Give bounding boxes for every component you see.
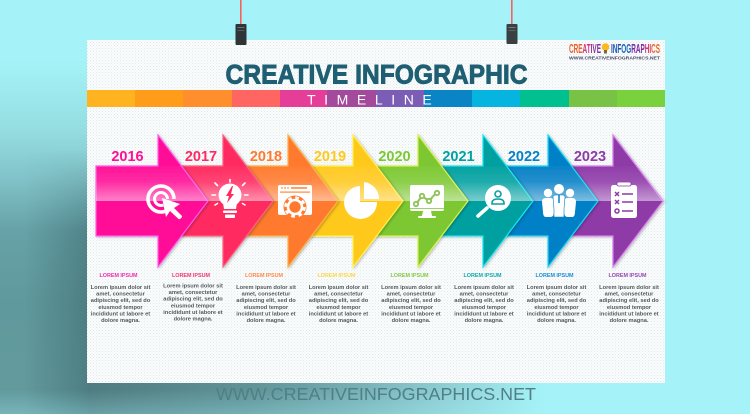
text block 2017: amet, consectetur	[169, 290, 218, 296]
text block 2018: incididunt ut labore et	[236, 311, 296, 317]
text block 2020: incididunt ut labore et	[381, 311, 441, 317]
text block 2020: adipiscing elit, sed do	[381, 298, 441, 304]
clip right	[506, 24, 518, 44]
text block 2018: dolore magna.	[247, 318, 286, 324]
logo: creative infographics	[569, 41, 660, 62]
text block 2019: dolore magna.	[319, 318, 358, 324]
title: CREATIVE INFOGRAPHIC	[226, 60, 528, 90]
text block 2023: adipiscing elit, sed do	[599, 298, 659, 304]
text block 2019: adipiscing elit, sed do	[309, 298, 369, 304]
year labels	[111, 149, 606, 165]
text block 2023: eiusmod tempor	[607, 305, 652, 311]
arrow 2016	[96, 135, 208, 267]
text block 2023: Lorem ipsum dolor sit	[599, 285, 659, 291]
text block 2023: incididunt ut labore et	[599, 311, 659, 317]
text block 2018: Lorem ipsum dolor sit	[236, 285, 296, 291]
year labels: 2017	[185, 149, 217, 165]
panel shadow	[0, 60, 545, 414]
text block 2021: amet, consectetur	[460, 292, 509, 298]
text block 2021: adipiscing elit, sed do	[454, 298, 514, 304]
icon: magnifier with user	[478, 185, 511, 216]
text block 2020: eiusmod tempor	[389, 305, 434, 311]
text block 2019: eiusmod tempor	[316, 305, 361, 311]
year labels: 2020	[378, 149, 411, 165]
year labels: 2022	[508, 149, 540, 165]
text block 2021: eiusmod tempor	[462, 305, 507, 311]
icon: light bulb	[212, 180, 248, 218]
subtitle: timeline: TIMELINE	[307, 92, 440, 108]
text block 2022: Lorem ipsum dolor sit	[527, 285, 586, 291]
arrow 2023	[551, 135, 663, 267]
year labels: 2023	[574, 149, 606, 165]
footer url: WWW.CREATIVEINFOGRAPHICS.NET	[216, 384, 536, 404]
text block 2022: eiusmod tempor	[534, 305, 579, 311]
logo: creative infographics: CREATIVE	[569, 41, 601, 56]
text block 2021: dolore magna.	[465, 318, 504, 324]
text block 2016: Lorem ipsum dolor sit	[91, 285, 150, 291]
icon: monitor with line chart	[410, 185, 444, 218]
text block 2016: adipiscing elit, sed do	[91, 298, 151, 304]
text block 2018: eiusmod tempor	[244, 305, 289, 311]
text block 2017: Lorem ipsum dolor sit	[163, 284, 223, 290]
text block 2017: eiusmod tempor	[171, 303, 216, 309]
column headings: LOREM IPSUM	[317, 273, 356, 279]
text block 2021: incididunt ut labore et	[454, 311, 514, 317]
text block 2017: dolore magna.	[174, 316, 213, 322]
column headings	[99, 273, 647, 279]
text block 2022: incididunt ut labore et	[527, 311, 586, 317]
arrow 2022	[486, 135, 598, 267]
text block 2022: dolore magna.	[537, 318, 576, 324]
year labels: 2018	[250, 149, 282, 165]
clip left	[236, 24, 246, 45]
text block 2023: dolore magna.	[610, 318, 649, 324]
year labels: 2019	[314, 149, 346, 165]
text block 2018: adipiscing elit, sed do	[236, 298, 296, 304]
column headings: LOREM IPSUM	[172, 273, 211, 279]
text block 2016: eiusmod tempor	[98, 305, 143, 311]
text block 2021: Lorem ipsum dolor sit	[454, 285, 514, 291]
text block 2022: adipiscing elit, sed do	[527, 298, 587, 304]
year labels: 2016	[111, 149, 144, 165]
arrow 2021	[421, 135, 533, 267]
arrow 2019	[291, 135, 403, 267]
column headings: LOREM IPSUM	[245, 273, 284, 279]
text block 2017: incididunt ut labore et	[163, 310, 223, 316]
text block 2016: amet, consectetur	[96, 292, 146, 298]
text block 2017: adipiscing elit, sed do	[163, 297, 223, 303]
text block 2018: amet, consectetur	[242, 292, 291, 298]
column headings: LOREM IPSUM	[390, 273, 429, 279]
text block 2016: incididunt ut labore et	[91, 311, 150, 317]
hanging rope right	[511, 0, 513, 25]
text block 2019: incididunt ut labore et	[309, 311, 368, 317]
icon: checklist clipboard	[611, 182, 637, 218]
white poster panel	[87, 40, 665, 383]
logo: creative infographics: INFOGRAPHICS	[611, 41, 660, 56]
text block 2019: amet, consectetur	[314, 292, 364, 298]
icon: click target	[148, 186, 182, 219]
logo: creative infographics: WWW.CREATIVEINFOGRAPHICS.NET	[569, 56, 660, 62]
arrow 2020	[356, 135, 468, 267]
icon: pie chart	[344, 182, 379, 219]
arrow 2018	[226, 135, 338, 267]
icon: group of people	[542, 184, 576, 217]
text block 2023: amet, consectetur	[605, 292, 654, 298]
rainbow band	[87, 90, 665, 107]
column headings: LOREM IPSUM	[535, 273, 574, 279]
hanging rope left	[240, 0, 242, 25]
column headings: LOREM IPSUM	[99, 273, 138, 279]
text block 2020: amet, consectetur	[387, 292, 436, 298]
text block 2020: dolore magna.	[392, 318, 431, 324]
logo bulb	[602, 43, 609, 54]
text block 2022: amet, consectetur	[532, 292, 582, 298]
column headings: LOREM IPSUM	[608, 273, 647, 279]
column text blocks	[91, 284, 659, 324]
icon: browser with gear	[278, 185, 312, 218]
arrow 2017	[161, 135, 273, 267]
column headings: LOREM IPSUM	[463, 273, 502, 279]
text block 2020: Lorem ipsum dolor sit	[381, 285, 441, 291]
year labels: 2021	[442, 149, 475, 165]
text block 2019: Lorem ipsum dolor sit	[309, 285, 368, 291]
text block 2016: dolore magna.	[101, 318, 140, 324]
